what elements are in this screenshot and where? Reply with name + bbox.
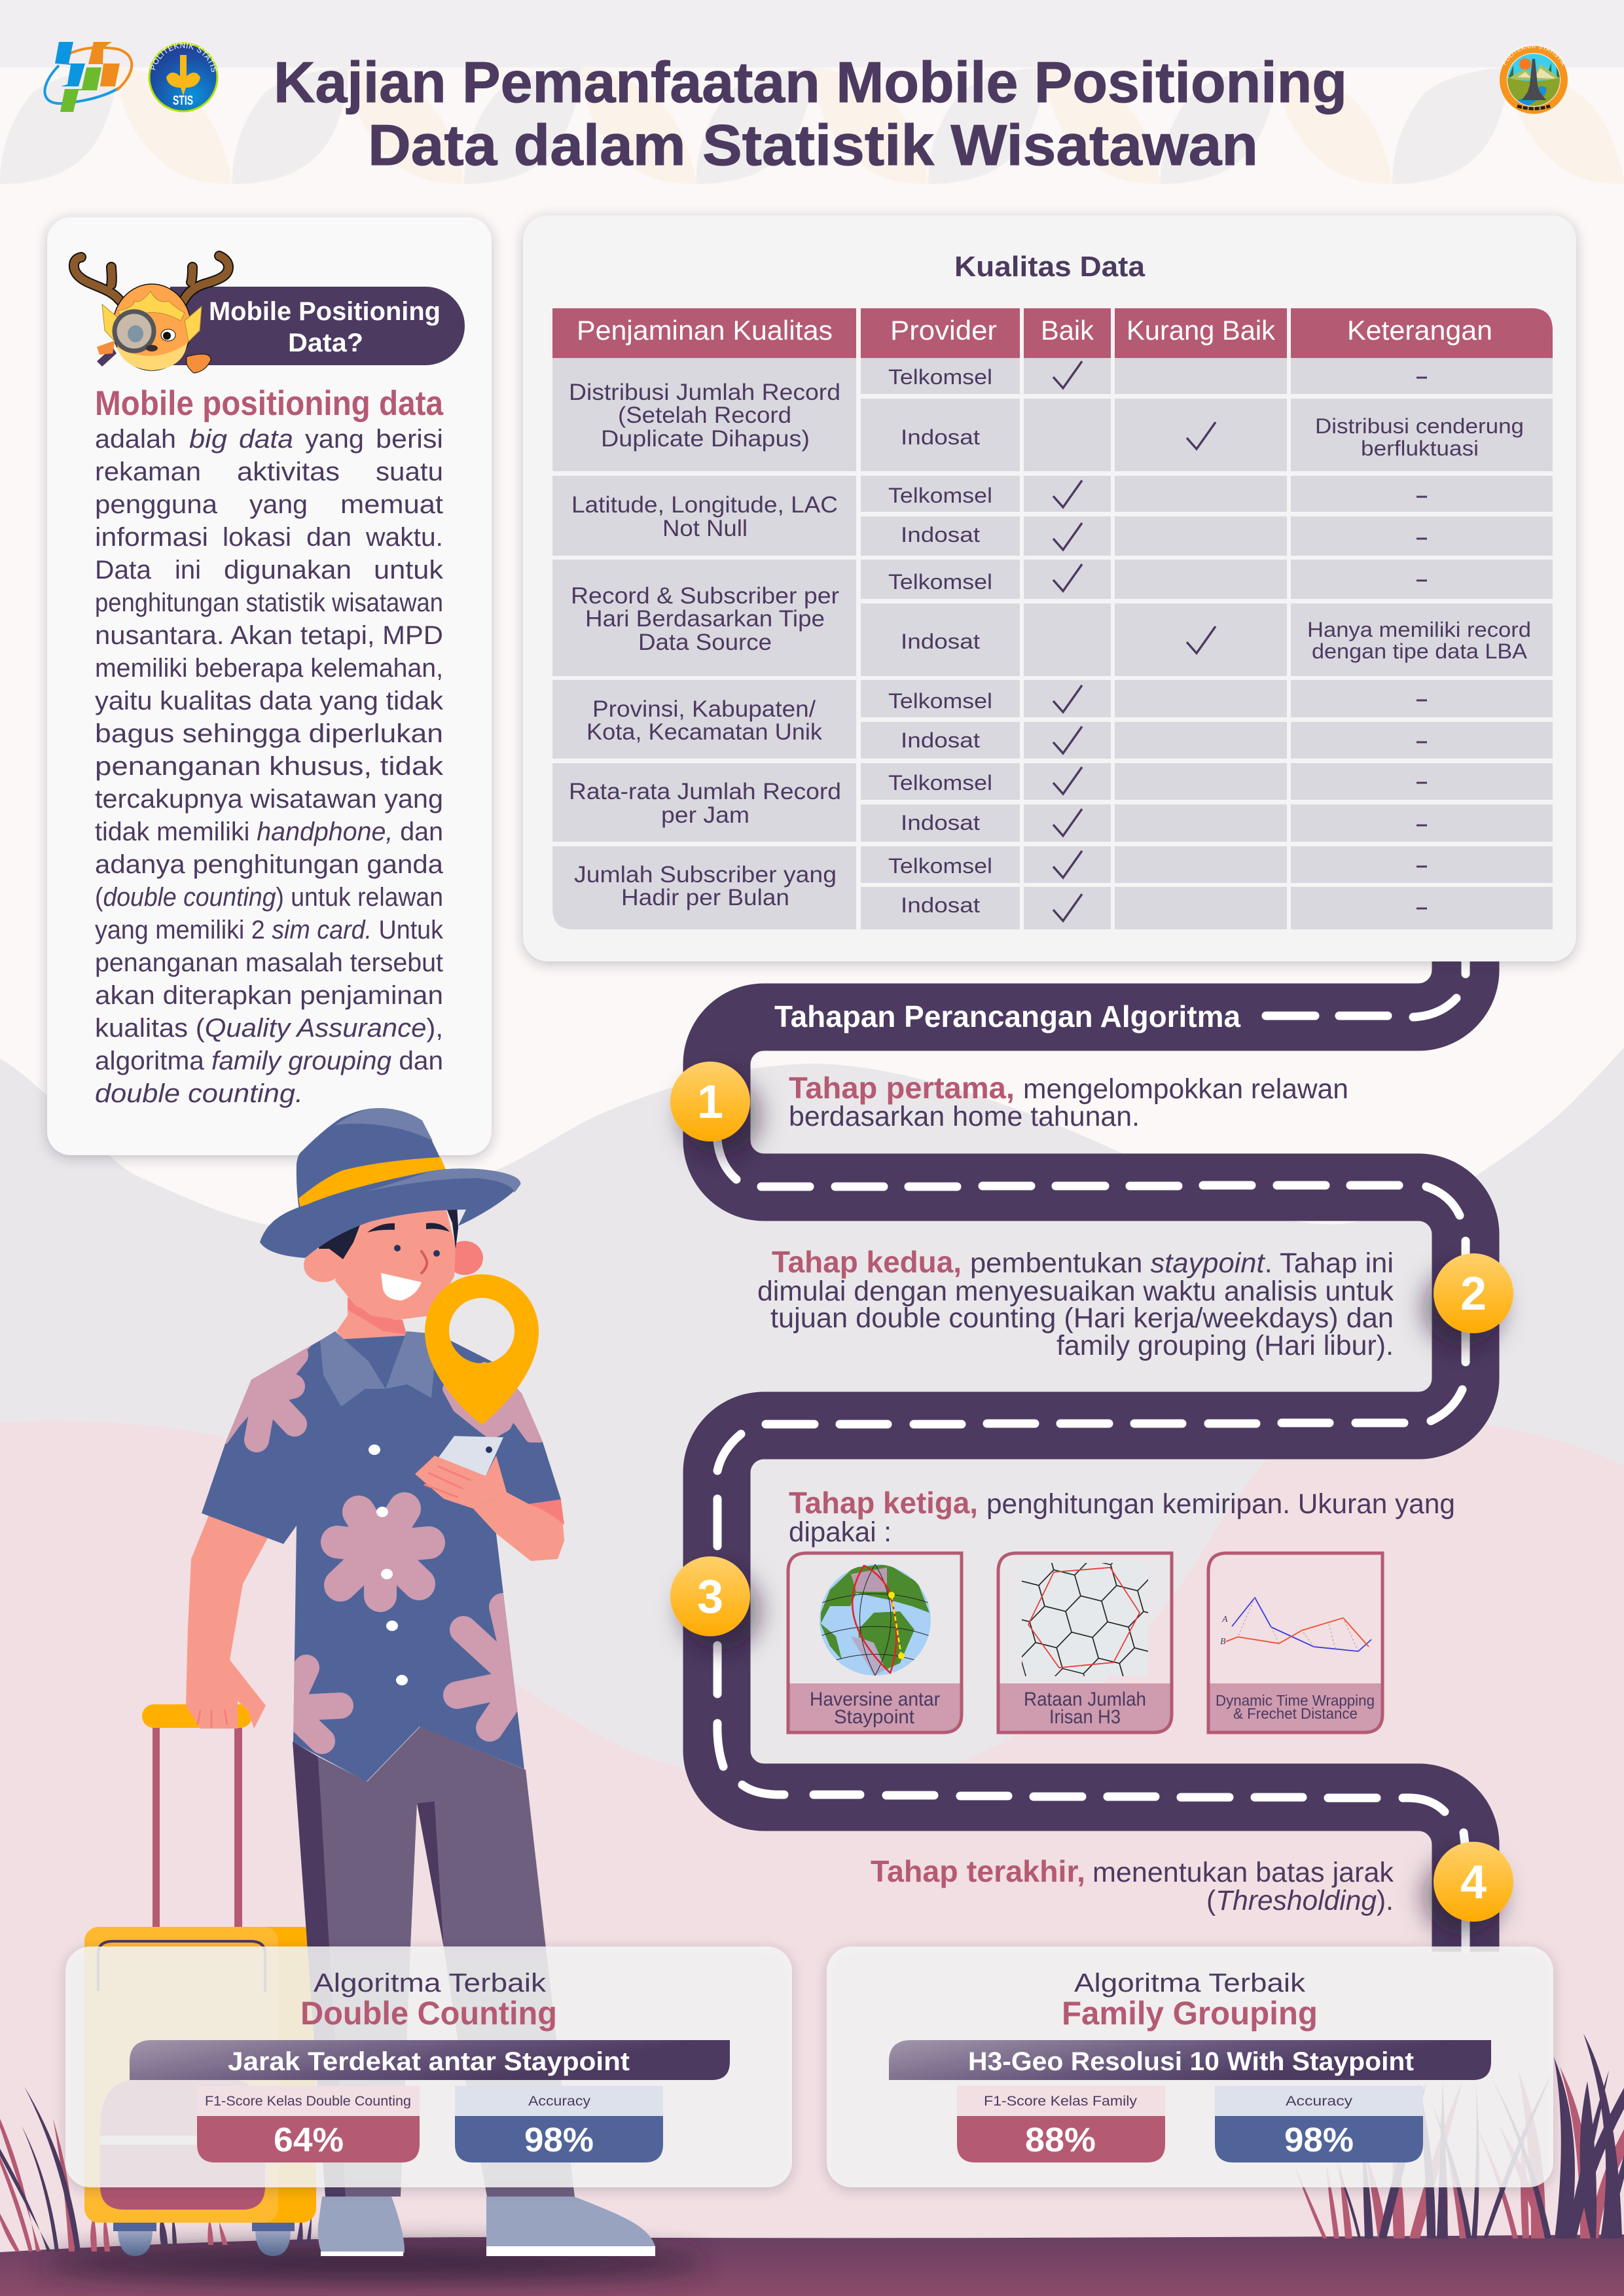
background gray hills <box>0 1047 1624 2296</box>
provider column: Indosat <box>901 630 980 653</box>
panel: best algorithm Family Grouping: Family Grouping <box>1062 1995 1318 2032</box>
body paragraph: adanya penghitungan ganda <box>95 850 444 879</box>
chart: two compared trajectories <box>1220 1598 1371 1651</box>
body paragraph: akan diterapkan penjaminan <box>95 981 443 1010</box>
keterangan notes: dengan tipe data LBA <box>1312 639 1528 663</box>
card: Haversine antar Staypoint <box>788 1553 962 1732</box>
quality criteria column: Record & Subscriber per <box>571 583 839 609</box>
provider column: Telkomsel <box>888 689 992 713</box>
body paragraph: lokasi <box>223 523 291 552</box>
body paragraph: informasi <box>95 523 208 552</box>
step badge 4: 4 <box>1460 1856 1487 1909</box>
heading pill <box>170 287 465 365</box>
heading pill: Data? <box>288 329 363 357</box>
body paragraph: untuk <box>374 556 444 584</box>
provider column: Telkomsel <box>888 365 992 389</box>
table header row: Kurang Baik <box>1127 315 1276 346</box>
step 4 text: menentukan batas jarak <box>1092 1857 1394 1888</box>
keterangan notes: Distribusi cenderung <box>1315 414 1524 438</box>
road: winding path of algorithm stages <box>717 942 1466 1952</box>
metric: F1 score <box>957 2086 1165 2162</box>
left arm <box>186 1515 268 1729</box>
metric: accuracy: Accuracy <box>1286 2094 1353 2109</box>
quality criteria column: Hadir per Bulan <box>621 885 789 910</box>
step 3 text <box>789 1486 1455 1548</box>
body paragraph: penanganan khusus, tidak <box>95 752 444 781</box>
body paragraph: yang <box>305 425 364 454</box>
metric: F1 score: 64% <box>274 2121 344 2159</box>
quality criteria column: Data Source <box>638 630 772 655</box>
step badge 4 <box>1434 1842 1513 1922</box>
banner <box>889 2040 1491 2080</box>
quality criteria column: Latitude, Longitude, LAC <box>571 492 838 518</box>
title: Data dalam Statistik Wisatawan <box>368 113 1258 177</box>
title <box>274 50 1347 177</box>
body paragraph: ini <box>175 556 201 584</box>
keterangan notes: berfluktuasi <box>1361 437 1479 460</box>
body paragraph: nusantara. Akan tetapi, MPD <box>95 621 443 650</box>
body paragraph: waktu. <box>365 523 443 552</box>
metric: accuracy <box>1215 2086 1423 2162</box>
keterangan dashes <box>1416 378 1427 908</box>
provider column: Telkomsel <box>888 484 992 507</box>
provider column: Indosat <box>901 523 980 547</box>
body paragraph: (double counting) untuk relawan <box>95 883 443 912</box>
keterangan notes <box>1307 414 1531 663</box>
provider column: Telkomsel <box>888 854 992 878</box>
body paragraph: tidak memiliki handphone, dan <box>95 817 443 846</box>
grass: right clump <box>1294 2034 1624 2238</box>
chart: two compared trajectories: A <box>1221 1615 1228 1624</box>
logo: Politeknik Statistika STIS <box>148 42 219 113</box>
body paragraph: dan <box>306 523 352 552</box>
body paragraph: pengguna <box>95 490 218 519</box>
metric: accuracy <box>455 2086 663 2162</box>
step badge 3 <box>670 1556 750 1636</box>
panel: best algorithm Family Grouping <box>827 1946 1553 2187</box>
step 2 text <box>757 1245 1394 1361</box>
banner: H3-Geo Resolusi 10 With Staypoint <box>968 2047 1414 2076</box>
body paragraph: penghitungan statistik wisatawan <box>95 588 443 617</box>
metric: F1 score <box>197 2086 420 2162</box>
table header row: Penjaminan Kualitas <box>577 315 833 346</box>
step 1 text <box>789 1071 1348 1132</box>
body paragraph: double counting. <box>95 1079 303 1108</box>
card: Haversine antar Staypoint: Haversine antar <box>810 1689 940 1710</box>
keterangan notes: Hanya memiliki record <box>1307 618 1531 641</box>
head <box>304 1204 483 1320</box>
step badge 3: 3 <box>697 1571 723 1623</box>
step 1 text: berdasarkan home tahunan. <box>789 1101 1140 1132</box>
shirt buttons <box>369 1444 408 1685</box>
metric: F1 score: F1-Score Kelas Family <box>984 2094 1138 2109</box>
provider column: Indosat <box>901 811 980 834</box>
quality criteria column: per Jam <box>661 802 749 828</box>
step 2 text: dimulai dengan menyesuaikan waktu analisis untuk <box>757 1276 1394 1307</box>
traveller figure <box>186 1108 655 2256</box>
step 3 text: Tahap ketiga, <box>789 1486 978 1520</box>
card: Rataan Jumlah Irisan H3: Rataan Jumlah <box>1024 1689 1146 1710</box>
table header row: Baik <box>1041 315 1094 346</box>
quality criteria column: Rata-rata Jumlah Record <box>569 779 841 804</box>
card: Rataan Jumlah Irisan H3 <box>996 1551 1173 1734</box>
step 4 text: (Thresholding). <box>1206 1885 1394 1916</box>
card: Rataan Jumlah Irisan H3: Irisan H3 <box>1049 1706 1121 1728</box>
provider column: Indosat <box>901 893 980 917</box>
table body cells <box>552 358 1553 929</box>
body paragraph: memiliki beberapa kelemahan, <box>95 654 443 683</box>
step badge 1: 1 <box>697 1076 723 1128</box>
metric: accuracy: 98% <box>1284 2121 1354 2159</box>
logo: Politeknik Statistika STIS: STIS <box>173 94 193 108</box>
body paragraph <box>95 425 444 1108</box>
body paragraph: digunakan <box>224 556 352 584</box>
step 2 text: family grouping (Hari libur). <box>1056 1330 1394 1361</box>
body paragraph: bagus sehingga diperlukan <box>95 719 443 748</box>
icon: deer mascot with magnifier <box>74 256 228 373</box>
shirt <box>202 1334 561 1782</box>
table header row: Keterangan <box>1347 315 1492 346</box>
top band <box>0 0 1624 67</box>
quality criteria column: Kota, Kecamatan Unik <box>586 719 823 745</box>
neck <box>336 1297 406 1389</box>
scalloped header decoration <box>0 67 1624 184</box>
provider column: Indosat <box>901 425 980 449</box>
panel: best algorithm Double Counting <box>65 1946 792 2187</box>
trousers <box>293 1727 575 2197</box>
banner: Jarak Terdekat antar Staypoint <box>228 2047 630 2076</box>
body paragraph: kualitas (Quality Assurance ), <box>95 1014 443 1043</box>
body paragraph: memuat <box>340 490 443 519</box>
title: Kajian Pemanfaatan Mobile Positioning <box>274 50 1347 115</box>
step 1 text: mengelompokkan relawan <box>1023 1073 1348 1105</box>
quality criteria column: Not Null <box>662 516 748 541</box>
check marks <box>1053 361 1216 921</box>
body paragraph: yaitu kualitas data yang tidak <box>95 687 444 715</box>
grass: left clump <box>0 2087 312 2251</box>
panel: Kualitas Data table <box>523 215 1576 961</box>
chart: two compared trajectories: B <box>1220 1637 1226 1647</box>
table header row <box>552 308 1553 358</box>
step 4 text <box>871 1854 1394 1916</box>
provider column: Telkomsel <box>888 771 992 795</box>
right arm with phone <box>415 1436 564 1561</box>
icon: location pin <box>425 1274 539 1425</box>
quality criteria column: Duplicate Dihapus) <box>601 426 810 452</box>
quality criteria column <box>569 380 841 910</box>
suitcase <box>84 1704 316 2256</box>
ground <box>0 2234 1624 2296</box>
panel: best algorithm Family Grouping: Algoritma Terbaik <box>1074 1969 1306 1998</box>
body paragraph: yang <box>249 490 308 519</box>
card: Dynamic Time Wrapping and Frechet Distance: & Frechet Distance <box>1233 1705 1358 1722</box>
provider column: Indosat <box>901 728 980 752</box>
shoes <box>318 2197 655 2256</box>
step 2 text: pembentukan staypoint. Tahap ini <box>970 1247 1394 1279</box>
body paragraph: yang memiliki 2 sim card. Untuk <box>95 916 444 944</box>
body paragraph: Data <box>95 556 152 584</box>
banner <box>130 2040 730 2080</box>
hat <box>260 1108 520 1258</box>
body paragraph: adalah <box>95 425 176 454</box>
step 4 text: Tahap terakhir, <box>871 1854 1085 1888</box>
panel: best algorithm Double Counting: Algoritma Terbaik <box>314 1969 547 1998</box>
figure ground shadow <box>39 2246 707 2280</box>
step badge 2 <box>1434 1253 1513 1333</box>
shirt collar <box>320 1331 437 1407</box>
table header row: Provider <box>890 315 997 346</box>
body heading: Mobile positioning data <box>95 384 443 423</box>
step 2 text: tujuan double counting (Hari kerja/weekdays) dan <box>770 1302 1394 1334</box>
step 2 text: Tahap kedua, <box>772 1245 962 1279</box>
card: Haversine antar Staypoint: Staypoint <box>834 1706 915 1728</box>
step badge 1 <box>670 1062 750 1141</box>
logo: BPS <box>45 42 132 112</box>
metric: F1 score: 88% <box>1025 2121 1096 2159</box>
quality criteria column: Distribusi Jumlah Record <box>569 380 840 405</box>
body paragraph: suatu <box>376 457 443 486</box>
body paragraph: big <box>189 425 227 454</box>
body paragraph: tercakupnya wisatawan yang <box>95 785 443 814</box>
body paragraph: aktivitas <box>237 457 340 486</box>
panel: Mobile Positioning Data explanation <box>47 217 492 1155</box>
provider column <box>888 365 992 917</box>
heading pill: Mobile Positioning <box>209 297 441 326</box>
metric: accuracy: 98% <box>524 2121 594 2159</box>
quality criteria column: (Setelah Record <box>618 403 791 428</box>
background pink hills <box>0 1420 1624 2296</box>
body paragraph: penanganan masalah tersebut <box>95 948 443 977</box>
shirt flowers <box>226 1343 540 1741</box>
body paragraph: algoritma family grouping dan <box>95 1047 443 1075</box>
quality criteria column: Hari Berdasarkan Tipe <box>585 606 825 632</box>
card: Dynamic Time Wrapping and Frechet Distance: Dynamic Time Wrapping <box>1216 1692 1375 1709</box>
quality criteria column: Provinsi, Kabupaten/ <box>592 696 816 722</box>
step badge 2: 2 <box>1460 1268 1487 1320</box>
step 3 text: dipakai : <box>789 1516 892 1548</box>
body paragraph: data <box>239 425 293 454</box>
body paragraph: rekaman <box>95 457 201 486</box>
metric: accuracy: Accuracy <box>528 2094 591 2109</box>
card: Dynamic Time Wrapping and Frechet Distance <box>1208 1553 1382 1732</box>
road heading: Tahapan Perancangan Algoritma <box>774 999 1240 1033</box>
body paragraph: berisi <box>376 425 443 454</box>
icon: H3 hexagon map <box>1022 1563 1148 1676</box>
panel: best algorithm Double Counting: Double Counting <box>300 1995 557 2032</box>
metric: F1 score: F1-Score Kelas Double Counting <box>205 2094 411 2109</box>
icon: globe with great-circle route <box>820 1564 931 1676</box>
quality criteria column: Jumlah Subscriber yang <box>574 862 837 888</box>
logo: right emblem <box>1500 44 1568 114</box>
provider column: Telkomsel <box>888 570 992 594</box>
step 3 text: penghitungan kemiripan. Ukuran yang <box>986 1488 1455 1520</box>
step 1 text: Tahap pertama, <box>789 1071 1015 1105</box>
table heading: Kualitas Data <box>954 251 1146 283</box>
